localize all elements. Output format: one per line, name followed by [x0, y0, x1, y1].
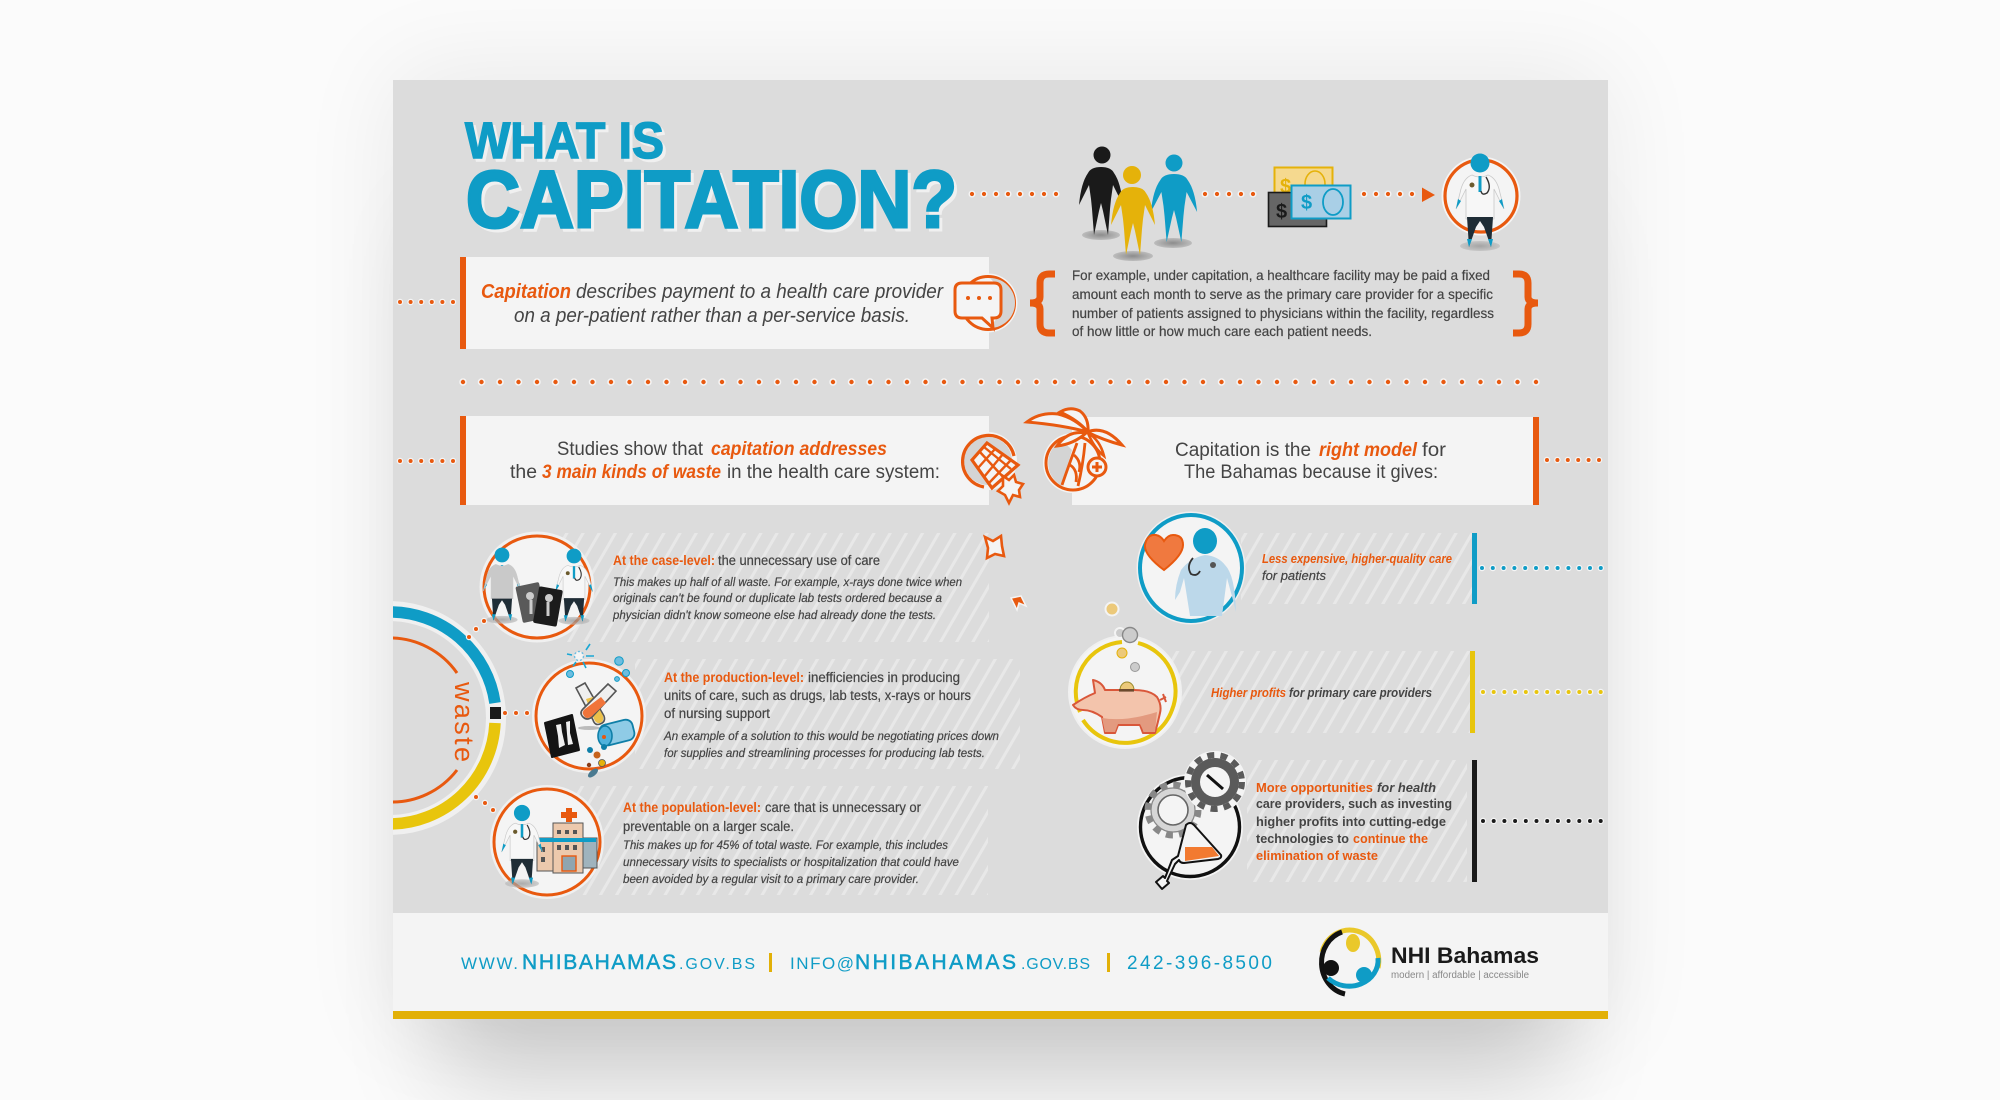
logo: NHI Bahamas: NHI Bahamas [1391, 943, 1539, 968]
item: less expensive care [1138, 513, 1477, 623]
contact details: .GOV.BS [679, 956, 755, 973]
panel: main sheet [282, 80, 1608, 1019]
dotted connector: left of waste heading [400, 458, 454, 464]
item: population level: preventable on a larger scale. [623, 819, 794, 834]
item: higher profits: Higher profits [1211, 686, 1286, 700]
contact details: .GOV.BS [1021, 956, 1090, 973]
dotted connector: blue [1482, 565, 1601, 571]
item: more opportunities: More opportunities [1256, 781, 1373, 795]
icon: palm tree [1027, 409, 1122, 493]
item: population level: At the population-level: [623, 800, 761, 815]
item: production level: units of care, such as drugs, lab tests, x-rays or hours [664, 688, 971, 703]
icon: piggy bank [1069, 628, 1181, 748]
panel: capitation definition [460, 257, 989, 349]
item: production level: At the production-level: [664, 670, 804, 685]
item: less expensive care: Less expensive, higher-quality care [1262, 552, 1452, 566]
item: more opportunities: elimination of waste [1256, 849, 1378, 863]
dots: ring to population level [473, 794, 496, 813]
dots: ring to case level [466, 618, 487, 640]
contact details: WWW. [461, 954, 518, 973]
text: capitation example: of how little or how much care each patient needs. [1072, 323, 1372, 339]
contact details [461, 951, 1272, 974]
item: population level: care that is unnecessary or [765, 800, 921, 815]
dotted connector: right of model heading [1547, 457, 1600, 463]
panel: right model heading [1072, 417, 1539, 505]
title: CAPITATION? [469, 158, 960, 248]
item: more opportunities: for health [1377, 781, 1436, 795]
panel: right model heading: right model [1319, 440, 1418, 461]
icon: waste net [959, 432, 1023, 503]
icon: money bills: $ [1280, 176, 1291, 198]
dotted connector: people to money [1205, 190, 1254, 198]
icon: doctor and hospital [492, 787, 602, 897]
text: capitation example: number of patients assigned to physicians within the facility, regardless [1072, 305, 1494, 321]
decorative waste piece: scrap [1011, 596, 1026, 610]
panel: capitation definition: Capitation [481, 281, 571, 303]
logo: NHI Bahamas: modern | affordable | accessible [1391, 970, 1529, 981]
item: higher profits: for primary care providers [1289, 686, 1432, 700]
panel: waste heading: in the health care system: [727, 462, 940, 483]
text: capitation example: amount each month to serve as the primary care provider for a specific [1072, 286, 1493, 302]
waste ring chart [393, 601, 506, 835]
item: more opportunities: higher profits into cutting-edge [1256, 815, 1446, 829]
right bracket [1513, 274, 1538, 333]
decorative waste piece: star [985, 536, 1004, 558]
icon: lab tests and pills [533, 644, 645, 779]
item: case level: the unnecessary use of care [718, 553, 880, 568]
item: population level: unnecessary visits to specialists or hospitalization that could have [623, 855, 959, 869]
title: WHAT IS [465, 112, 664, 169]
panel: right model heading: Capitation is the [1175, 440, 1311, 461]
item: production level: of nursing support [664, 706, 770, 721]
waste ring chart: waste [449, 681, 479, 762]
item: production level: inefficiencies in producing [808, 670, 960, 685]
left bracket [1030, 274, 1055, 333]
dotted connector: yellow [1483, 689, 1601, 695]
icon: doctors with x-rays [482, 534, 593, 640]
item: case level [482, 533, 989, 642]
footer [393, 913, 1608, 1019]
icon: heart and doctor [1138, 513, 1244, 623]
item: case level: This makes up half of all waste. For example, x-rays done twice when [613, 575, 962, 589]
panel: waste heading: the [510, 462, 537, 483]
item: less expensive care: for patients [1262, 569, 1326, 583]
item: case level: originals can't be found or duplicate lab tests ordered because a [613, 591, 942, 605]
item: production level: An example of a solution to this would be negotiating prices down [663, 729, 999, 743]
icon: chat bubble [955, 274, 1018, 332]
panel: capitation definition: describes payment to a health care provider [576, 281, 944, 303]
item: more opportunities [1137, 755, 1477, 889]
text: capitation example [1072, 267, 1494, 339]
title: WHAT IS [468, 115, 667, 172]
icon: money bills [1268, 168, 1350, 226]
item: more opportunities: continue the [1353, 832, 1428, 846]
title: CAPITATION? [466, 155, 957, 245]
dotted connector: black [1483, 818, 1601, 824]
dotted connector: title to people [972, 190, 1068, 198]
icon: falling coin [1106, 602, 1118, 616]
item: population level: been avoided by a regular visit to a primary care provider. [623, 872, 919, 886]
item: population level: This makes up for 45% of total waste. For example, this includes [623, 838, 948, 852]
contact details: NHIBAHAMAS [855, 951, 1016, 974]
item: more opportunities: technologies to [1256, 832, 1349, 846]
dotted arrow: money to doctor [1364, 188, 1435, 202]
dotted divider [463, 378, 1537, 386]
item: production level [533, 644, 1020, 779]
item: higher profits [1069, 628, 1475, 748]
item: production level: for supplies and streamlining processes for producing lab tests. [664, 746, 985, 760]
panel: right model heading: The Bahamas because it gives: [1184, 462, 1438, 483]
panel: capitation definition: on a per-patient rather than a per-service basis. [514, 305, 910, 327]
title [465, 112, 960, 248]
contact details: NHIBAHAMAS [522, 951, 676, 974]
item: population level [492, 786, 988, 897]
dotted connector: left of definition [400, 299, 454, 305]
icon: money bills: $ [1276, 201, 1287, 223]
logo: NHI Bahamas [1322, 930, 1539, 994]
panel: waste heading: capitation addresses [711, 439, 887, 460]
icon: doctor in circle [1444, 154, 1518, 251]
dots: ring to production level [502, 710, 530, 716]
infographic canvas [369, 66, 1631, 1100]
item: case level: At the case-level: [613, 553, 715, 568]
item: more opportunities: care providers, such as investing [1256, 797, 1452, 811]
panel: right model heading: for [1422, 440, 1447, 461]
panel: waste heading [460, 416, 989, 505]
panel: waste heading: Studies show that [557, 439, 704, 460]
icon: gears and flask [1137, 755, 1243, 889]
contact details: 242-396-8500 [1127, 953, 1272, 974]
icon: money bills: $ [1301, 192, 1312, 214]
item: case level: physician didn't know someone else had already done the tests. [612, 608, 936, 622]
panel: waste heading: 3 main kinds of waste [542, 462, 721, 483]
icon: three patients [1079, 146, 1197, 261]
contact details: INFO@ [790, 954, 854, 973]
text: capitation example: For example, under capitation, a healthcare facility may be paid a fixed [1072, 267, 1490, 283]
